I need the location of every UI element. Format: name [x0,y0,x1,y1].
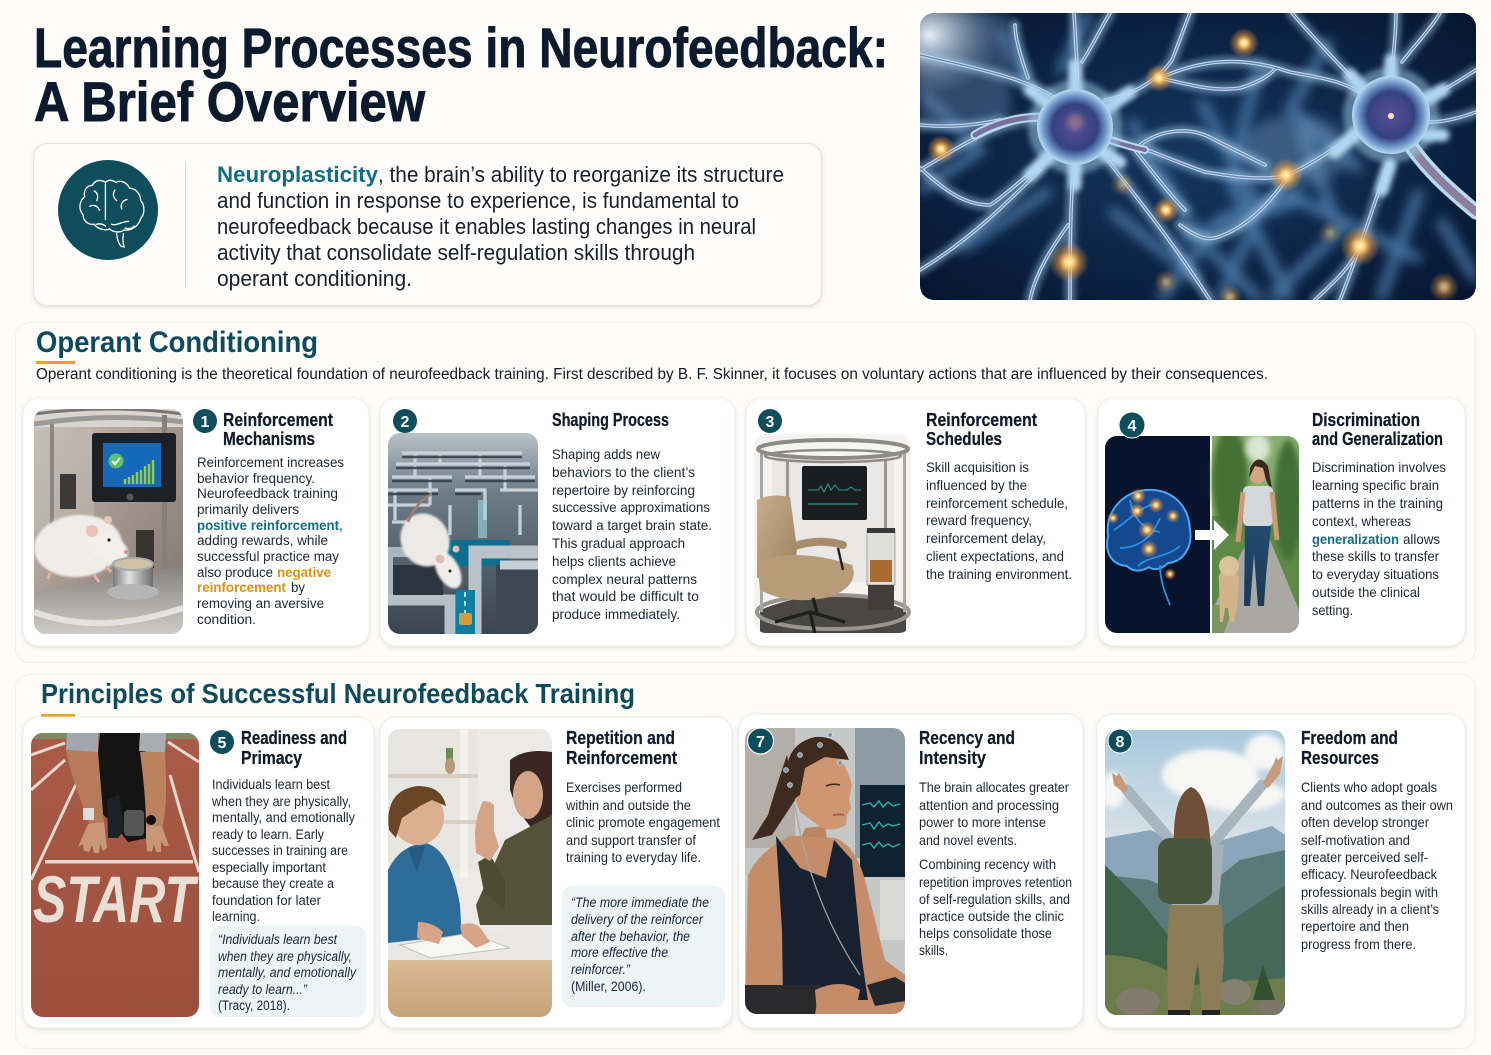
card 8 text: Clients who adopt goals [1301,779,1437,795]
quote: Miller 2006: more effective the [571,945,668,960]
card 3 title: Reinforcement [926,410,1037,430]
card 6 title [566,728,677,768]
image: chair inside glass chamber [754,434,911,634]
card 7 title: Recency and [919,728,1015,748]
badge 7: 7 [756,734,765,751]
card 2 text: helps clients achieve [552,553,676,569]
quote: Miller 2006: “The more immediate the [571,895,709,910]
badge 1 [193,409,217,433]
card 2 title: Shaping Process [552,410,669,430]
panel: neuroplasticity intro [34,144,822,306]
card 5 text [211,777,355,924]
card 6: repetition and reinforcement [380,717,732,1028]
card 2 text: This gradual approach [552,535,685,551]
image: runner at start line: START [33,862,199,936]
badge 7 [748,728,774,754]
card 6 title: Repetition and [566,728,675,748]
card 4 text: allows [1403,531,1440,547]
card 7: recency and intensity [739,714,1083,1028]
card 2 text: Shaping adds new [552,446,661,462]
quote: Tracy 2018: (Tracy, 2018). [218,998,290,1013]
card 6 title: Reinforcement [566,748,677,768]
badge 5: 5 [218,735,227,752]
card 6 text: Exercises performed [566,779,682,795]
card 1 text: negative [277,565,331,580]
card 4 text: outside the clinical [1312,584,1420,600]
card 4 text: setting. [1312,602,1353,618]
card 8 text: skills already in a client’s [1301,901,1439,917]
card 5 text: ready to learn. Early [212,827,324,842]
card 3: reinforcement schedules [746,398,1085,646]
icon: brain in teal circle [58,160,158,260]
card 2: shaping process [380,398,735,646]
quote: Miller 2006: (Miller, 2006). [571,979,646,994]
card 7 title [919,728,1015,768]
image: rat in a maze [388,433,538,634]
card 8 text: and outcomes as their own [1301,797,1453,813]
card 8 text: progress from there. [1301,936,1416,952]
badge 8: 8 [1116,734,1125,751]
heading: principles: Principles of Successful Neurofeedback Training [41,678,635,709]
image: glowing brain and woman walking dog [1105,428,1302,633]
card 7 text: and novel events. [919,832,1017,848]
card 8 text: professionals begin with [1301,884,1438,900]
card 8 text: repertoire and then [1301,918,1409,934]
quote: Tracy 2018: when they are physically, [218,949,352,964]
card 8 title: Freedom and [1301,728,1398,748]
badge 3: 3 [766,414,775,431]
card 1 text [197,455,344,627]
card 5 text: successes in training are [212,843,348,858]
card 4 text: to everyday situations [1312,566,1439,582]
card 2 text: repertoire by reinforcing [552,482,695,498]
card 7 text: power to more intense [919,814,1046,830]
card 1 text: reinforcement [197,580,286,595]
card 2 text: behaviors to the client’s [552,464,695,480]
card 5 text: especially important [212,860,326,875]
image: neuron network [920,13,1476,300]
title: Learning Processes in Neurofeedback: [34,16,888,79]
card 2 text: toward a target brain state. [552,517,712,533]
card 3 text: influenced by the [926,477,1027,493]
card 7 text: skills. [919,942,948,958]
card 4 text: Discrimination involves [1312,459,1446,475]
card 4 text: generalization [1312,531,1399,547]
card 7 text: attention and processing [919,797,1059,813]
card 4 text: patterns in the training [1312,495,1443,511]
quote: Miller 2006 [562,886,725,1007]
card 4 title: and Generalization [1312,429,1443,449]
card 1 text: Neurofeedback training [197,486,338,501]
card 3 text: Skill acquisition is [926,459,1029,475]
badge 8 [1108,729,1132,753]
card 3 text: the training environment. [926,566,1072,582]
card 2 text: produce immediately. [552,606,680,622]
card 1 title: Reinforcement [223,410,333,430]
card 1 title: Mechanisms [223,429,315,449]
card 5 text: mentally, and emotionally [212,810,355,825]
card 7 text [919,779,1072,958]
card 7 text: helps consolidate those [919,925,1052,941]
card 5 text: when they are physically, [211,794,351,809]
quote: Tracy 2018: “Individuals learn best [218,932,338,947]
card 8 text [1301,779,1453,952]
badge 4: 4 [1128,418,1137,435]
card 7 title: Intensity [919,748,986,768]
card 8: freedom and resources [1097,714,1465,1028]
card 4 text: context, whereas [1312,513,1411,529]
card 8 title [1301,728,1398,768]
quote: Miller 2006: after the behavior, the [571,929,690,944]
card 5 title: Primacy [241,748,302,768]
card 7 text: practice outside the clinic [919,908,1064,924]
card 8 text: efficacy. Neurofeedback [1301,866,1438,882]
card 3 title: Schedules [926,429,1002,449]
card 4 text: these skills to transfer [1312,548,1439,564]
card 8 text: greater perceived self- [1301,849,1428,865]
card 4: discrimination and generalization [1098,398,1465,646]
card 1 title [223,410,333,449]
panel: operant conditioning [16,322,1476,662]
card 5 title [241,728,347,768]
card 1 text: removing an aversive [197,596,324,611]
card 1 text: Reinforcement increases [197,455,344,470]
image: hiker with raised arms [1101,730,1286,1016]
card 1 text: also produce [197,565,273,580]
card 7 text: repetition improves retention [919,874,1072,890]
card 7 text: of self-regulation skills, and [919,891,1070,907]
card 1 text: by [291,580,305,595]
badge 2 [393,409,417,433]
card 1 text: condition. [197,612,256,627]
card 1 text: behavior frequency. [197,471,315,486]
icon: arrow [1195,520,1229,550]
card 8 title: Resources [1301,748,1379,768]
card 6 text: training to everyday life. [566,849,701,865]
card 1 text: successful practice may [197,549,339,564]
badge 1: 1 [201,414,210,431]
image: runner at start line [31,733,199,1017]
heading: operant conditioning: Operant Conditioning [36,326,318,359]
card 4 title [1312,410,1443,449]
card 5: readiness and primacy [23,717,374,1028]
intro text: , the brain’s ability to reorganize its structure [378,162,784,187]
card 5 title: Readiness and [241,728,347,748]
badge 5 [210,730,234,754]
card 3 text: reinforcement delay, [926,530,1046,546]
intro text: neurofeedback because it enables lasting changes in neural [217,214,756,239]
card 6 text [565,779,720,865]
card 3 text: reinforcement schedule, [926,495,1068,511]
card 4 text: learning specific brain [1312,477,1439,493]
card 2 text: successive approximations [552,499,710,515]
quote: Tracy 2018: mentally, and emotionally [218,965,357,980]
image: rat in operant chamber [31,409,183,634]
title: A Brief Overview [34,70,425,133]
card 8 text: self-motivation and [1301,832,1410,848]
card 3 text: reward frequency, [926,512,1032,528]
card 2 text: that would be difficult to [552,588,699,604]
card 5 text: foundation for later [212,893,321,908]
badge 4 [1119,412,1145,438]
card 6 text: and support transfer of [566,832,696,848]
card 7 text: Combining recency with [919,856,1056,872]
panel: principles of successful training [16,674,1476,1048]
quote: Tracy 2018: ready to learn...” [218,982,307,997]
card 3 text [926,459,1072,582]
card 6 text: within and outside the [565,797,691,813]
intro text: operant conditioning. [217,266,412,291]
badge 3 [758,409,782,433]
quote: Miller 2006: reinforcer.” [571,962,630,977]
intro text: and function in response to experience, is fundamental to [217,188,739,213]
card 5 text: Individuals learn best [212,777,330,792]
intro text [217,162,784,291]
card 4 text [1312,459,1446,618]
card 6 text: clinic promote engagement [566,814,720,830]
card 5 text: learning. [212,909,260,924]
card 4 title: Discrimination [1312,410,1420,430]
card 1 text: adding rewards, while [197,533,328,548]
card 1 text: , [339,518,343,533]
card 1 text: positive reinforcement [197,518,339,533]
card 3 title [926,410,1037,449]
card 3 text: client expectations, and [926,548,1064,564]
card 2 text: complex neural patterns [552,571,697,587]
card 1 text: primarily delivers [197,502,299,517]
title [34,16,888,133]
quote: Tracy 2018 [210,926,366,1017]
card 1: reinforcement mechanisms [23,398,369,646]
intro text: Neuroplasticity [217,162,379,187]
card 7 text: The brain allocates greater [919,779,1069,795]
section introduction: Operant conditioning is the theoretical foundation of neurofeedback training. First described by B. F. Skinner, it focuses on voluntary actions that are influenced by their consequences. [36,366,1268,383]
badge 2: 2 [401,414,410,431]
image: woman with EEG sensors [745,728,905,1014]
quote: Miller 2006: delivery of the reinforcer [571,912,703,927]
card 2 text [552,446,712,622]
card 5 text: because they create a [212,876,334,891]
intro text: activity that consolidate self-regulation skills through [217,240,695,265]
image: boy high-fiving teacher [388,729,552,1017]
card 8 text: often develop stronger [1301,814,1429,830]
